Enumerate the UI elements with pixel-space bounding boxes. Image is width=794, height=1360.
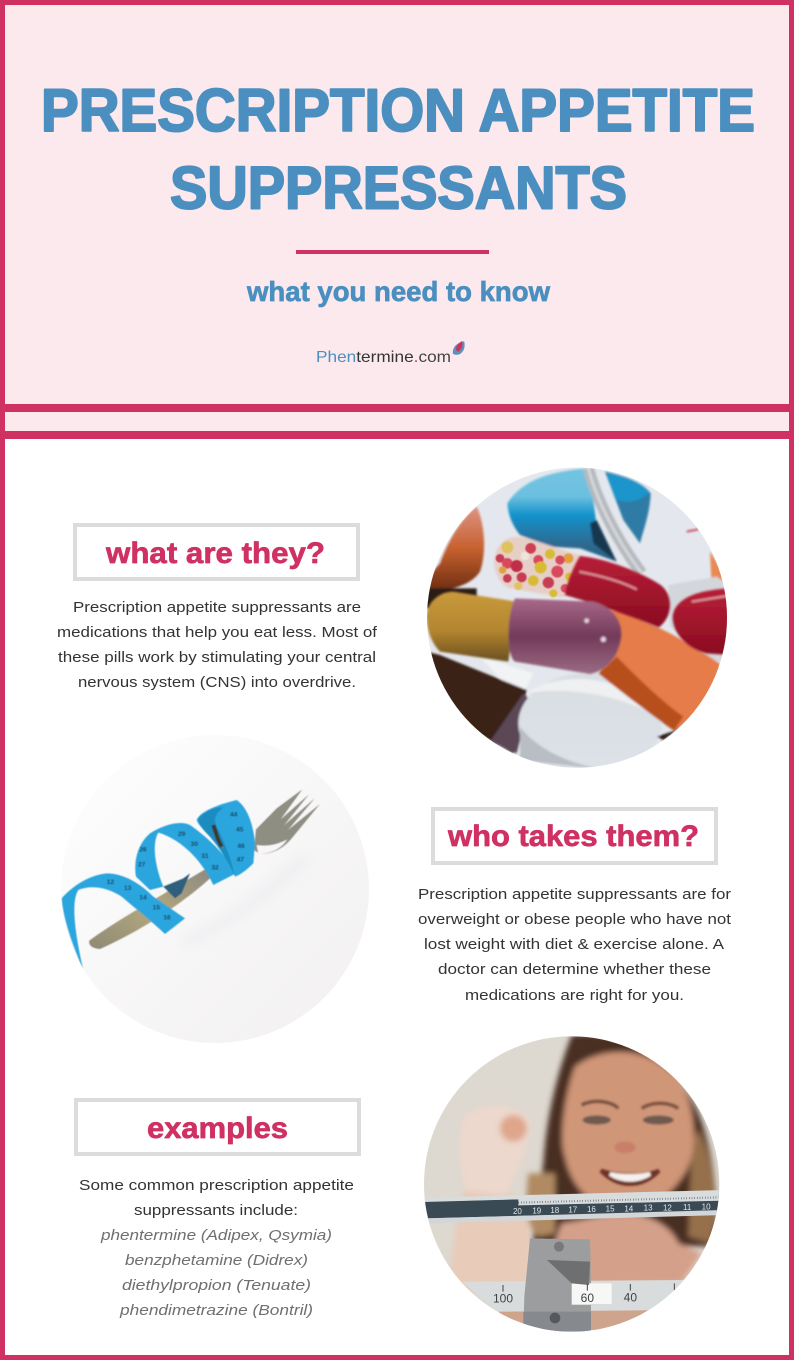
panel: examples — [76, 1100, 359, 1319]
text: who takes them description: Prescription appetite suppressants are for — [418, 886, 731, 903]
photo: fork wrapped in measuring tape: 14 — [139, 894, 147, 901]
text: examples intro — [79, 1177, 354, 1219]
panel: what are they — [57, 525, 378, 691]
title — [41, 77, 755, 222]
heading: examples: examples — [147, 1112, 288, 1145]
text: what are they description: medications that help you eat less. Most of — [57, 624, 378, 641]
title: PRESCRIPTION APPETITE — [41, 77, 755, 144]
text: examples intro: suppressants include: — [134, 1202, 298, 1219]
photo: fork wrapped in measuring tape: 29 — [178, 831, 186, 838]
photo: fork wrapped in measuring tape: 27 — [138, 862, 146, 869]
scale beam: 11 — [683, 1203, 692, 1212]
photo: fork wrapped in measuring tape — [61, 784, 369, 1043]
photo: fork wrapped in measuring tape: 31 — [201, 853, 209, 860]
panel: content background — [5, 439, 789, 1355]
text: who takes them description: doctor can determine whether these — [438, 961, 711, 978]
text: who takes them description: lost weight with diet & exercise alone. A — [424, 936, 724, 953]
panel: header — [0, 0, 794, 431]
title: SUPPRESSANTS — [170, 154, 627, 222]
scale beam: 12 — [663, 1203, 672, 1212]
photo: smiling woman behind a scale — [424, 1036, 720, 1332]
scale slider and lower bar: 100 — [493, 1292, 513, 1306]
text: what are they description — [57, 599, 378, 691]
scale beam: 16 — [587, 1205, 596, 1214]
scale beam: 10 — [702, 1202, 711, 1211]
scale slider and lower bar — [462, 1238, 692, 1332]
text: examples intro: Some common prescription appetite — [79, 1177, 354, 1194]
text: who takes them description: medications are right for you. — [465, 987, 684, 1004]
scale beam: 18 — [550, 1206, 560, 1215]
text: who takes them description — [418, 886, 732, 1004]
photo: fork wrapped in measuring tape: 13 — [124, 885, 132, 892]
text: who takes them description: overweight or obese people who have not — [418, 911, 732, 928]
photo: fork wrapped in measuring tape: 32 — [211, 864, 219, 871]
title divider — [296, 250, 489, 254]
photo: fork wrapped in measuring tape: 46 — [237, 843, 245, 850]
scale beam: 19 — [532, 1206, 542, 1215]
photo: fork wrapped in measuring tape: 30 — [191, 841, 198, 848]
subtitle: what you need to know — [246, 276, 550, 307]
list: example drugs — [100, 1227, 332, 1319]
list: example drugs: diethylpropion (Tenuate) — [122, 1277, 311, 1294]
scale beam: 13 — [644, 1204, 653, 1213]
text: what are they description: Prescription appetite suppressants are — [73, 599, 361, 616]
scale beam: 20 — [513, 1207, 522, 1216]
panel: who takes them — [418, 809, 732, 1004]
heading: what are they — [75, 525, 358, 579]
photo: fork wrapped in measuring tape: 47 — [237, 856, 244, 863]
text: what are they description: these pills work by stimulating your central — [58, 649, 376, 666]
heading: who takes them: who takes them? — [447, 820, 699, 853]
scale slider and lower bar: 60 — [581, 1291, 594, 1305]
logo: Phentermine.com — [316, 341, 465, 366]
photo: fork wrapped in measuring tape: 15 — [153, 904, 160, 911]
list: example drugs: phentermine (Adipex, Qsymia) — [100, 1227, 332, 1244]
heading: who takes them — [433, 809, 716, 863]
photo: fork wrapped in measuring tape: 44 — [230, 812, 238, 819]
scale beam — [423, 1190, 725, 1223]
list: example drugs: benzphetamine (Didrex) — [125, 1252, 308, 1269]
scale beam: 15 — [606, 1205, 615, 1214]
photo: fork wrapped in measuring tape: 12 — [107, 879, 114, 886]
scale slider and lower bar: 40 — [624, 1290, 637, 1304]
list: example drugs: phendimetrazine (Bontril) — [119, 1302, 313, 1319]
logo: Phentermine.com: Phentermine .com — [316, 349, 451, 366]
scale beam: 14 — [624, 1204, 634, 1213]
photo: fork wrapped in measuring tape: 45 — [236, 827, 244, 834]
photo: capsules and pills — [427, 468, 727, 768]
text: what are they description: nervous system (CNS) into overdrive. — [78, 674, 356, 691]
photo: fork wrapped in measuring tape: 26 — [139, 847, 147, 854]
scale beam: 17 — [568, 1206, 578, 1215]
heading: what are they: what are they? — [105, 537, 325, 570]
heading: examples — [76, 1100, 359, 1154]
photo: fork wrapped in measuring tape: 16 — [163, 914, 171, 921]
